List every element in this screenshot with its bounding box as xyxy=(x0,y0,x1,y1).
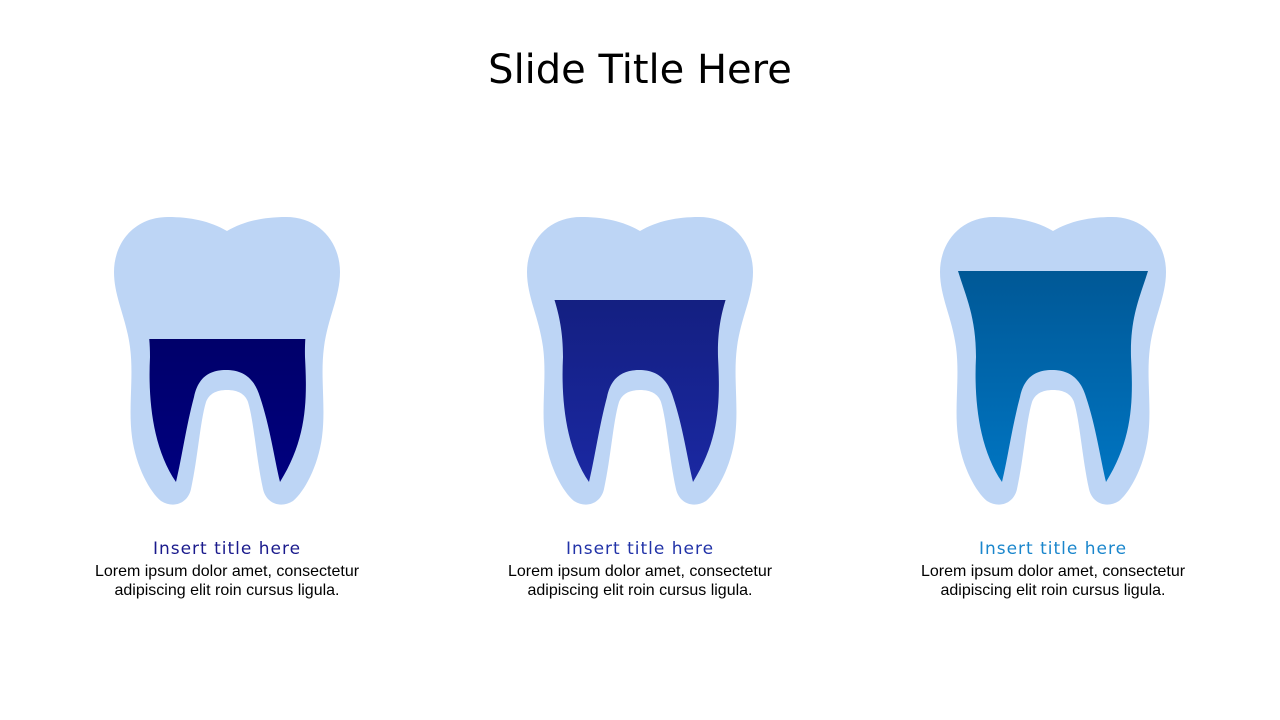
caption 2: Lorem ipsum dolor amet, consectetur adipiscing elit roin cursus ligula. xyxy=(508,563,772,599)
caption 3 xyxy=(921,539,1185,599)
caption 1 xyxy=(95,539,359,599)
caption 2: Insert title here xyxy=(566,539,714,559)
icon: tooth 2 xyxy=(527,217,753,505)
caption 1: Lorem ipsum dolor amet, consectetur adipiscing elit roin cursus ligula. xyxy=(95,563,359,599)
icon: tooth 1 xyxy=(114,217,340,505)
icon: tooth 3 xyxy=(940,217,1166,505)
caption 3: Lorem ipsum dolor amet, consectetur adipiscing elit roin cursus ligula. xyxy=(921,563,1185,599)
caption 2 xyxy=(508,539,772,599)
caption 3: Insert title here xyxy=(979,539,1127,559)
caption 1: Insert title here xyxy=(153,539,301,559)
title: Slide Title Here xyxy=(488,47,792,93)
